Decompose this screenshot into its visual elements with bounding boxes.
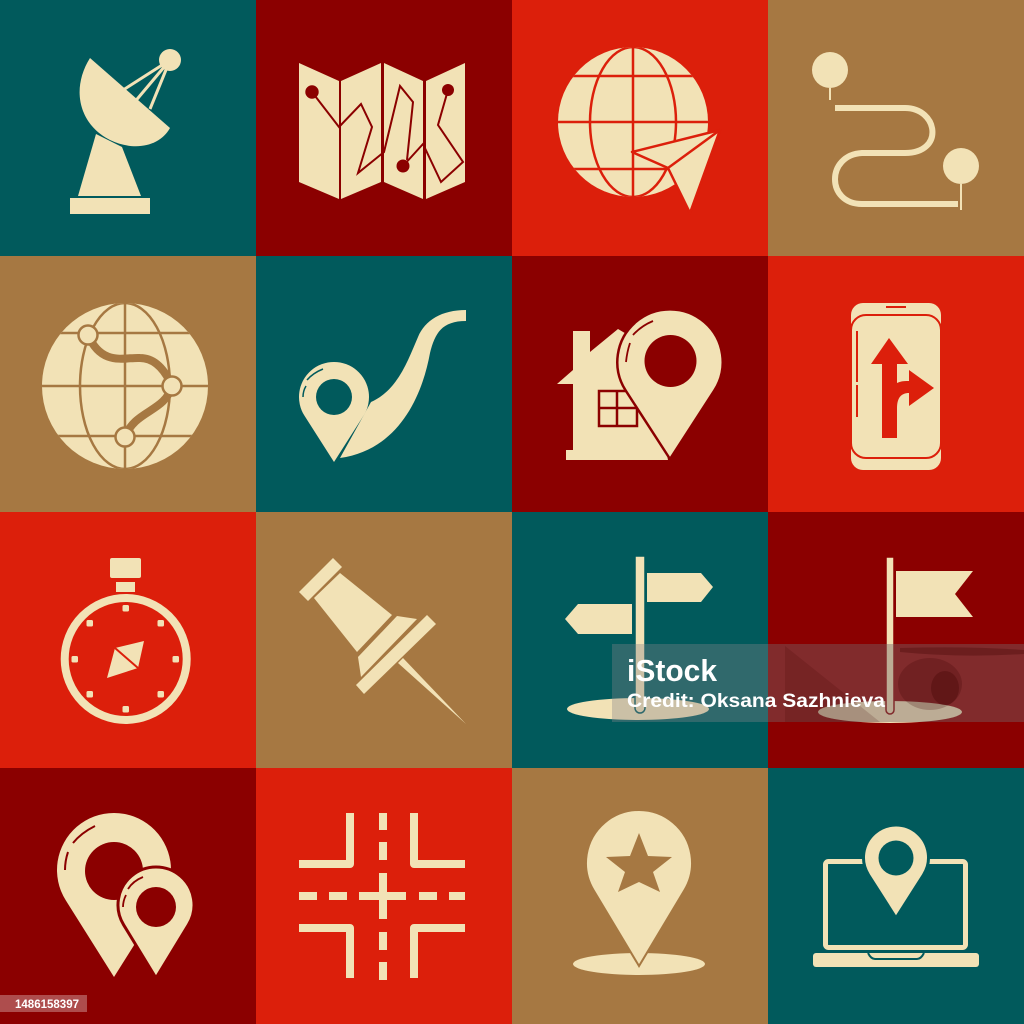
- icon: signpost: [565, 556, 713, 720]
- icon: smartphone with arrows: [851, 303, 941, 470]
- panel: flag: [768, 512, 1024, 768]
- icon: flag: [818, 557, 973, 723]
- watermark credit: Credit: Oksana Sazhnieva: [627, 690, 885, 712]
- icon: paper plane: [632, 130, 720, 213]
- panel: globe route: [0, 256, 256, 512]
- icon: globe: [555, 45, 710, 199]
- icon: location pin: [863, 825, 928, 918]
- panel: laptop location: [768, 768, 1024, 1024]
- panel: satellite dish: [0, 0, 256, 256]
- panel: star pin: [512, 768, 768, 1024]
- icon: globe with route: [40, 300, 210, 470]
- image id label: [0, 995, 87, 1012]
- panel: push pin: [256, 512, 512, 768]
- icon: satellite dish: [70, 49, 181, 214]
- icon: location pin: [299, 362, 369, 462]
- panel: winding route: [768, 0, 1024, 256]
- icon: folded map with route: [299, 63, 465, 199]
- icon: curved road: [340, 310, 466, 458]
- icon: location pin: [617, 309, 723, 459]
- panel: signpost: [512, 512, 768, 768]
- panel: pin and road: [256, 256, 512, 512]
- icon: house: [557, 329, 668, 460]
- panel: two pins: [0, 768, 256, 1024]
- icon: star location pin: [573, 810, 705, 975]
- panel: home location: [512, 256, 768, 512]
- icon: laptop: [813, 862, 979, 967]
- panel: crossroads: [256, 768, 512, 1024]
- icon: large location pin: [57, 813, 171, 977]
- panel: phone navigation: [768, 256, 1024, 512]
- panel: folded map: [256, 0, 512, 256]
- icon: compass: [65, 558, 187, 720]
- icon: route between two pins: [812, 52, 979, 210]
- image id label: 1486158397: [15, 997, 79, 1011]
- panel: globe with paper plane: [512, 0, 768, 256]
- icon: crossroads: [299, 813, 465, 980]
- watermark brand: iStock: [627, 653, 718, 688]
- icon: push pin: [299, 558, 466, 724]
- panel: compass: [0, 512, 256, 768]
- icon: small location pin: [118, 867, 194, 978]
- watermark band: [612, 644, 1024, 722]
